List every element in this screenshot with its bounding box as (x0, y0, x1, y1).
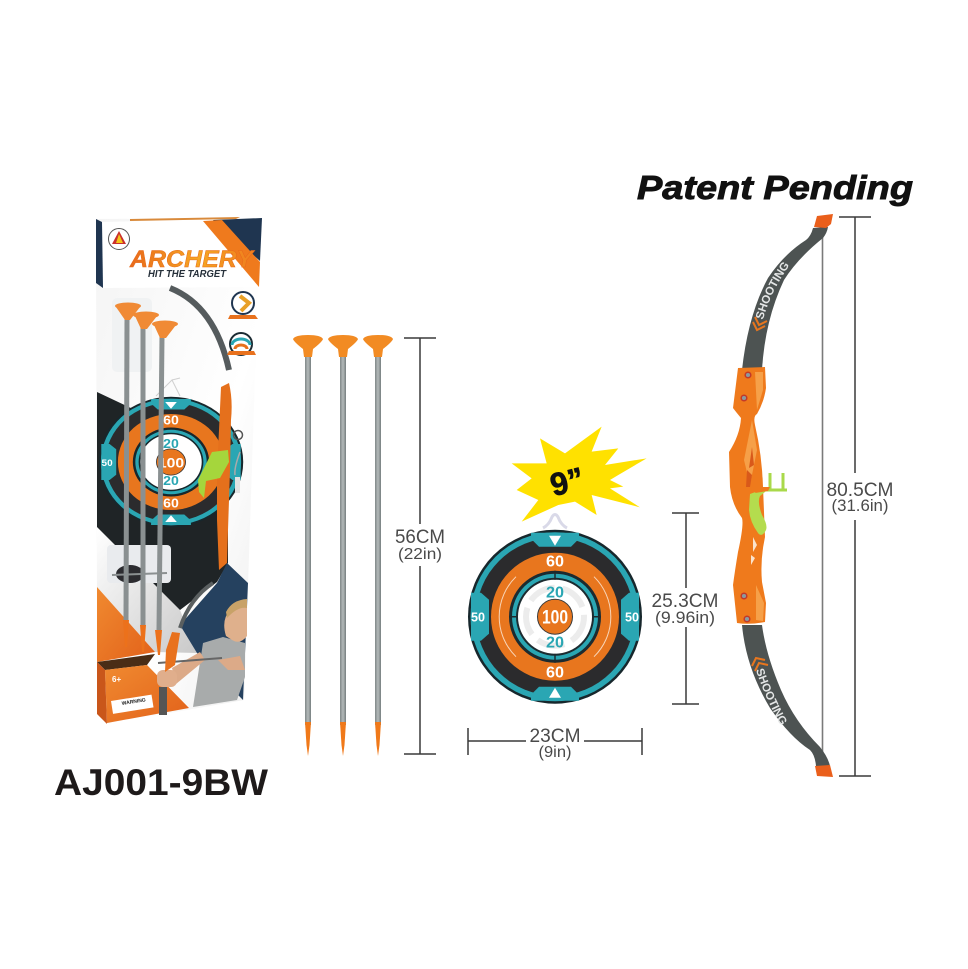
white arcs (499, 577, 611, 657)
three arrows (293, 335, 393, 756)
target (468, 530, 642, 704)
bow length dimension: (31.6in) (832, 496, 888, 515)
upper limb label: SHOOTING (756, 262, 788, 320)
white diagonal band (97, 527, 197, 653)
target width dimension: (9in) (538, 744, 572, 761)
mini target (99, 397, 243, 527)
arrow length dimension: (22in) (398, 546, 442, 563)
mini target: 100 (158, 455, 184, 471)
bullseye (538, 599, 572, 634)
product package (96, 217, 262, 724)
score labels: 60 (546, 665, 564, 682)
score labels: 100 (542, 608, 568, 629)
product title: ARCHERY (129, 246, 255, 273)
mini green arrow rest (198, 450, 229, 498)
mini parts list (234, 430, 242, 493)
lower limb (742, 625, 830, 766)
target width dimension: 23CM (530, 726, 580, 747)
target height dimension (652, 513, 718, 704)
upper chevrons (753, 317, 767, 330)
blister pack (112, 298, 152, 372)
target height dimension: (9.96in) (655, 608, 715, 627)
mini arrow 2 (133, 312, 159, 652)
patent pending heading: Patent Pending (637, 169, 913, 206)
score labels: 50 (471, 611, 485, 625)
starburst: 9 inch: 9” (547, 460, 588, 503)
ring dividers (509, 571, 601, 663)
bow (729, 214, 833, 777)
outer ring (468, 530, 642, 704)
package body (96, 218, 262, 724)
triangles (549, 536, 561, 546)
hand (157, 670, 177, 687)
orange base front (105, 665, 189, 723)
mini string detail (156, 378, 180, 396)
lower chevrons (752, 658, 768, 671)
orange base side (97, 662, 107, 724)
upper limb (742, 227, 828, 370)
orange ring (491, 553, 619, 681)
lower limb label path (756, 670, 795, 750)
green grip (749, 488, 770, 535)
mini target: 20 (163, 436, 179, 451)
riser highlights (744, 372, 764, 621)
model number: AJ001-9BW (54, 762, 268, 803)
upper tip (814, 214, 833, 228)
head (224, 602, 247, 642)
mini bow upper limb (170, 288, 229, 370)
mini target: 60 (163, 496, 179, 511)
riser bolts (741, 372, 751, 622)
package header (96, 217, 262, 288)
score labels: 20 (546, 585, 564, 602)
lower limb label: SHOOTING (756, 668, 786, 724)
riser (729, 367, 766, 624)
product subtitle: HIT THE TARGET (148, 269, 227, 280)
arrow 3 (363, 335, 393, 756)
logo (108, 228, 130, 250)
drawn arrow (158, 658, 222, 663)
navy panel (180, 563, 248, 700)
inner rings (509, 571, 601, 663)
mini arrow 1 (115, 302, 141, 647)
orange panel (97, 587, 155, 662)
starburst: 9 inch (512, 427, 647, 522)
teal tabs (471, 533, 639, 701)
bow string (822, 236, 824, 768)
mini suction mount (107, 545, 171, 583)
score labels: 50 (625, 611, 639, 625)
man with bow (157, 583, 247, 715)
mini bow riser (217, 383, 232, 570)
age label: 6+ (112, 675, 121, 684)
feature badges (227, 292, 258, 355)
target width dimension (468, 726, 642, 761)
score labels: 20 (546, 635, 564, 652)
mini arrow 3 (152, 320, 178, 655)
lower tip (815, 765, 833, 777)
bow riser (165, 632, 180, 672)
lower cut-outs (751, 537, 757, 565)
target height dimension: 25.3CM (652, 591, 718, 612)
score labels: 60 (546, 554, 564, 571)
drawing arm (218, 656, 245, 670)
arrow length dimension: 56CM (395, 527, 445, 548)
green arrow rest (760, 473, 787, 490)
riser cut-outs (746, 447, 754, 487)
mini target: 50 (102, 458, 113, 469)
bow length dimension (826, 217, 894, 776)
rest mount (755, 487, 770, 493)
bow length dimension: 80.5CM (826, 480, 894, 501)
gray dashed ring (526, 588, 584, 646)
mini target: 20 (163, 474, 179, 488)
warning label (111, 695, 154, 714)
arrow 1 (293, 335, 323, 756)
dark panel behind target (97, 392, 228, 610)
brown shelf (97, 654, 155, 670)
black textured ring (476, 538, 634, 696)
upper limb label path (763, 262, 792, 320)
target hanger (543, 514, 567, 528)
arrow length dimension (395, 338, 445, 754)
mini target: 60 (163, 413, 179, 427)
bow limb (180, 583, 213, 628)
score labels (471, 554, 639, 682)
lower bow (159, 687, 167, 715)
shirt (193, 637, 245, 707)
extended arm (172, 652, 205, 684)
hair (226, 599, 247, 618)
arrow 2 (328, 335, 358, 756)
warning label: WARNING (121, 697, 146, 707)
